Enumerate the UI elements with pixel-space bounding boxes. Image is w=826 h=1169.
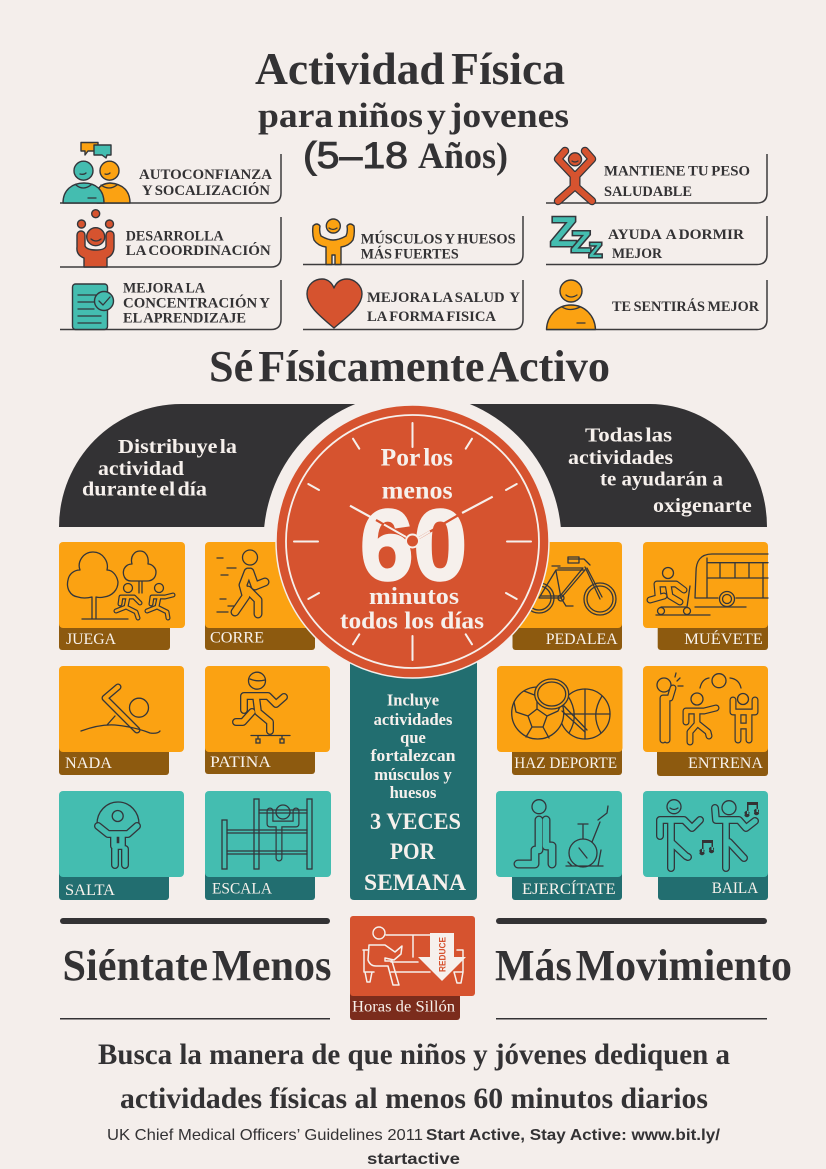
activity: ejercítate [496,791,622,900]
activity: corre: CORRE [210,630,264,647]
activity: juega [59,542,185,650]
icon: juggling person [77,210,114,267]
activity: haz deporte: HAZ DEPORTE [514,755,617,772]
banner text left: durante el día [82,479,207,501]
clock surround [264,392,562,690]
icon: zzz: Z [571,226,591,259]
icon: strong person [313,219,354,264]
icon: runner [217,550,265,614]
activity: salta [59,791,184,900]
activity: muévete [643,542,768,650]
panel: three times a week: 3 VECES [370,809,461,834]
clock: todos los días [340,608,484,635]
source footer: Start Active, Stay Active: www.bit.ly/ [426,1127,721,1144]
panel: benefits [60,142,767,330]
closing message: Busca la manera de que niños y jóvenes dediquen a [98,1039,730,1071]
benefit: desarrolla la coordinación [60,210,281,267]
icon: coach and children [657,673,755,742]
line right [496,1018,767,1020]
title: Actividad Física [255,43,565,94]
heading: sé físicamente activo: Sé Físicamente Activo [209,342,610,391]
icon: swimmer [81,687,160,733]
benefit: salud y forma física: LA FORMA FISICA [367,309,497,325]
banner text right: te ayudarán a [600,469,723,491]
benefit: músculos y huesos más fuertes: MÁS FUERTES [361,246,459,263]
icon: heart [307,279,362,328]
benefit: te sentirás mejor [546,280,767,330]
benefit: concentración y aprendizaje: MEJORA LA [123,281,206,297]
title [255,43,569,177]
panel: three times a week: fortalezcan [370,746,456,765]
banner text right: oxigenarte [653,495,752,517]
activity: haz deporte [497,666,622,775]
icon: zzz: Z [589,240,602,262]
banner text right: actividades [568,447,673,469]
benefit: autoconfianza y socialización: AUTOCONFIANZA [139,167,273,183]
closing message [98,1039,730,1115]
activity: escala: ESCALA [212,881,272,898]
panel: three times a week: huesos [390,783,437,802]
benefit: dormir mejor: AYUDA A DORMIR [608,227,745,243]
activity: pedalea [497,542,622,650]
icon: bicycle [524,557,616,615]
icon: person on sofa [363,927,463,985]
activity: ejercítate: EJERCÍTATE [522,879,616,898]
benefit: autoconfianza y socialización [60,142,281,203]
icon: zzz: Z [550,208,577,255]
benefit: peso saludable [546,151,767,203]
title: Años) [418,136,508,177]
source footer: UK Chief Medical Officers’ Guidelines 2011 [107,1127,423,1144]
icon: reduce arrow: REDUCE [438,937,448,972]
icon: dancers and music notes [660,800,759,868]
dark banner [59,404,767,527]
icon: zzz [550,208,602,262]
icon: two people talking [63,142,130,203]
clock: 60 [360,490,467,602]
benefit: salud y forma física [303,279,523,330]
banner text left [82,436,237,501]
benefit: concentración y aprendizaje: CONCENTRACIÓN Y [123,295,271,312]
banner text left: Distribuye la [118,436,237,458]
activity: juega: JUEGA [66,631,116,648]
benefit: desarrolla la coordinación: LA COORDINACIÓN [126,242,271,259]
source footer [107,1127,721,1168]
divider bar right [496,918,767,924]
benefit: músculos y huesos más fuertes: MÚSCULOS Y HUESOS [361,230,516,247]
panel: three times a week [350,640,477,900]
icon: jump rope [97,802,139,865]
activity: baila [643,791,768,900]
activity: pedalea: PEDALEA [546,631,618,648]
icon: skateboarder [236,672,290,743]
icon: balls and racket [512,679,610,739]
heading: siéntate menos: Siéntate Menos [62,941,332,990]
banner text left: actividad [98,458,185,480]
benefit: peso saludable: MANTIENE TU PESO [604,164,750,180]
banner text right [568,425,752,517]
line left [60,1018,330,1020]
benefit: concentración y aprendizaje: EL APRENDIZAJE [123,311,246,327]
heading: más movimiento: Más Movimiento [495,941,792,990]
divider bar left [60,918,330,924]
panel: three times a week: SEMANA [364,870,466,895]
activity: muévete: MUÉVETE [684,629,763,648]
benefit: autoconfianza y socialización: Y SOCALIZACIÓN [142,182,271,199]
clock [276,405,549,678]
benefit: peso saludable: SALUDABLE [604,184,692,200]
panel: three times a week: músculos y [374,765,452,784]
activity: entrena: ENTRENA [688,755,763,772]
icon: trees and children [67,551,173,619]
activity: patina: PATINA [210,754,271,771]
panel: three times a week: POR [390,839,435,864]
icon: happy person [546,280,596,330]
icon: kneeling and exercise bike [518,800,608,867]
panel: three times a week: Incluye [387,690,439,710]
benefit: concentración y aprendizaje [60,280,281,330]
sofa tile: horas de sillón: Horas de Sillón [352,999,455,1016]
benefit: te sentirás mejor: TE SENTIRÁS MEJOR [612,298,760,315]
activity: entrena [643,666,768,776]
benefit: salud y forma física: MEJORA LA SALUD Y [367,290,521,306]
clock: minutos [369,583,459,610]
benefit: dormir mejor: MEJOR [612,246,663,262]
activity: nada: NADA [65,755,112,772]
benefit: desarrolla la coordinación: DESARROLLA [126,229,224,245]
activity: patina [205,666,330,774]
title: para niños y jovenes [258,96,569,135]
icon: jumping figure [558,151,592,201]
benefit: dormir mejor [546,208,767,264]
icon: climbing frame [222,799,312,869]
title: (5–18 [303,135,408,176]
clock: Por los [381,445,453,472]
activity: salta: SALTA [65,882,115,899]
closing message: actividades físicas al menos 60 minutos diarios [120,1083,708,1115]
panel: three times a week: actividades [374,710,453,729]
banner text right: Todas las [585,425,672,447]
icon: bus and scooter [650,554,768,615]
source footer: startactive [367,1151,460,1168]
activity: corre [205,542,330,650]
panel: three times a week: que [400,728,426,747]
benefit: músculos y huesos más fuertes [303,216,523,264]
sofa tile: horas de sillón [350,916,475,1020]
activity: escala [205,791,331,900]
activity: nada [59,666,184,775]
clock: menos [382,478,453,505]
activity: baila: BAILA [712,880,759,897]
icon: document with check [72,284,114,330]
